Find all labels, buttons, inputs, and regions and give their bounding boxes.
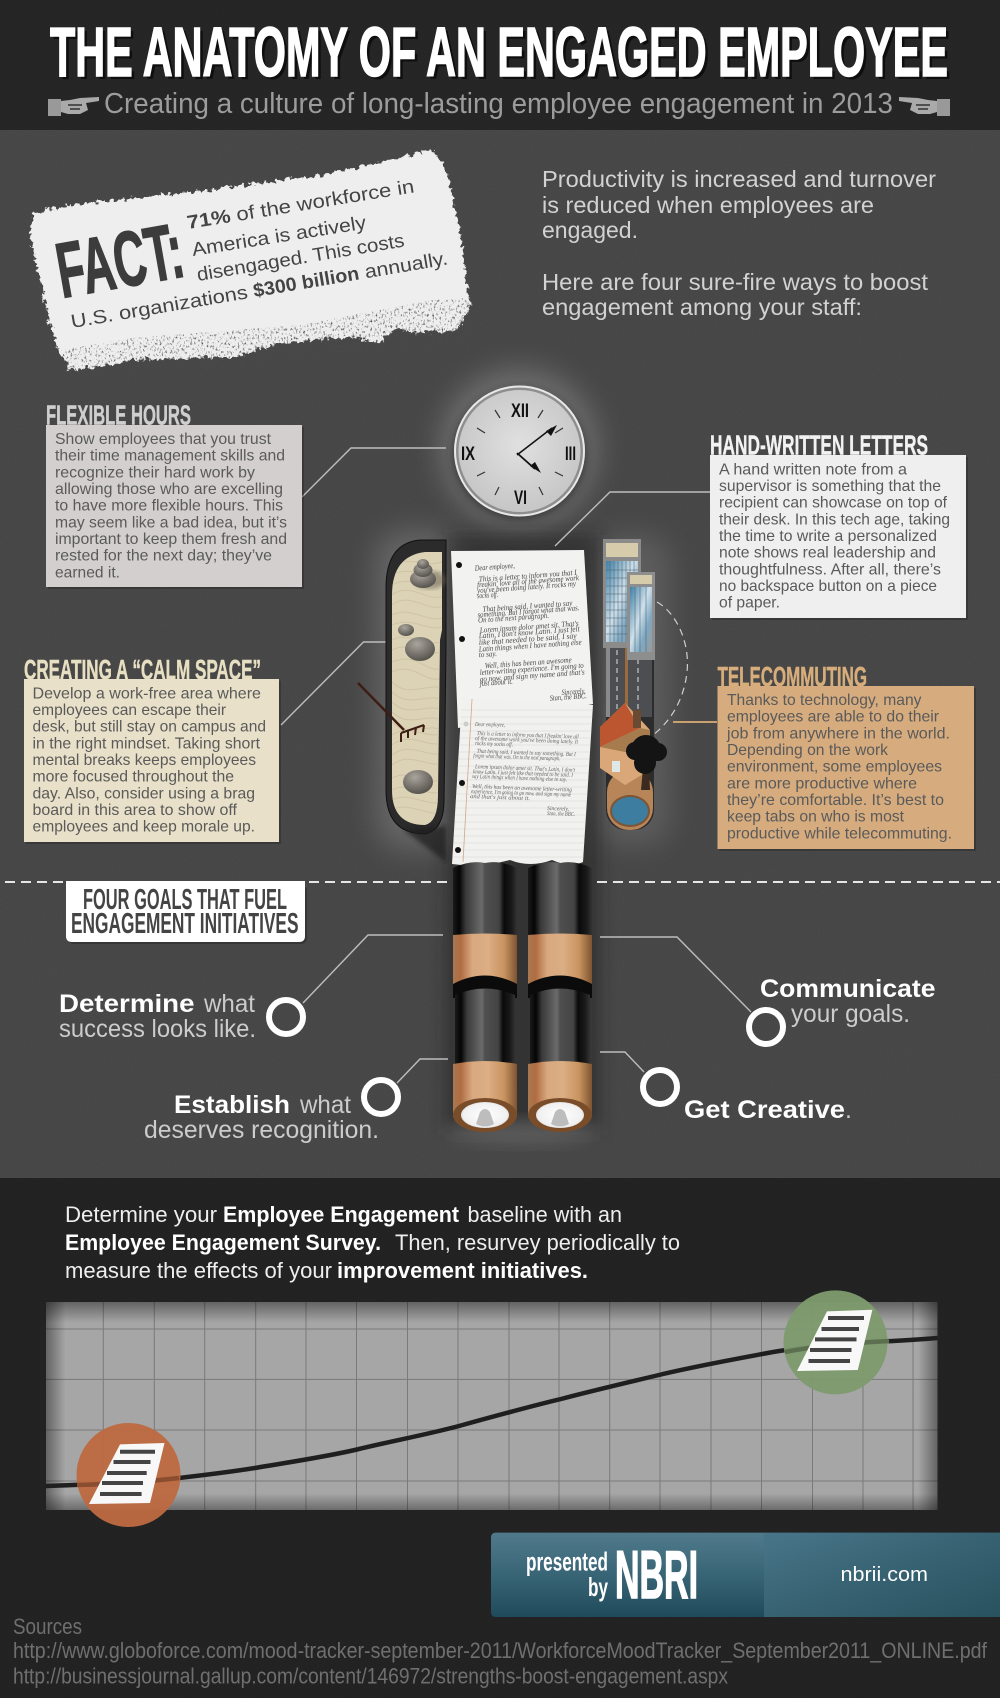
header band	[0, 0, 1000, 130]
goal: get creative: .	[845, 1096, 852, 1124]
bottom band	[0, 1178, 1000, 1698]
body: flexible hours: to have more flexible hours. This	[55, 498, 283, 515]
handwriting second letter: Stan, the BBC.	[547, 811, 575, 818]
fact text: disengaged. This costs	[195, 231, 406, 286]
right battery	[528, 862, 592, 1132]
line chart	[46, 1290, 938, 1527]
handwriting second letter	[470, 722, 579, 818]
chart curve	[46, 1338, 938, 1486]
body: flexible hours: Show employees that you trust	[55, 431, 272, 448]
icon: wall clock head: III	[565, 444, 576, 465]
body: flexible hours: allowing those who are excelling	[55, 481, 283, 498]
goal: communicate	[600, 937, 936, 1044]
fact text: annually.	[363, 249, 449, 283]
main background	[0, 130, 1000, 1178]
icon: wall clock head: VI	[514, 488, 527, 509]
right building	[627, 572, 655, 660]
body: telecommuting: productive while telecommuting.	[727, 825, 952, 842]
icon: pointing hand right	[899, 97, 950, 116]
body: calm space	[32, 685, 266, 836]
heading: four goals: ENGAGEMENT INITIATIVES	[71, 908, 298, 940]
fact text: $300 billion	[252, 264, 361, 302]
banner: presented by NBRI: NBRI	[615, 1537, 698, 1613]
handwriting first letter: Stan, the BBC.	[550, 691, 587, 703]
body: calm space: mental breaks keeps employees	[32, 752, 256, 769]
body: flexible hours: may seem like a bad idea, but it’s	[55, 514, 287, 531]
heading: four goals: FOUR GOALS THAT FUEL	[83, 884, 287, 916]
banner: presented by NBRI: by	[588, 1572, 608, 1602]
body: flexible hours: rested for the next day; they’ve	[55, 548, 272, 565]
pool deck	[607, 770, 653, 830]
connector: calm space	[281, 642, 414, 725]
body: flexible hours: their time management skills and	[55, 448, 285, 465]
handwriting second letter: experience. I'm going to go now, and sign my name	[471, 789, 571, 798]
goal: get creative	[600, 1052, 852, 1124]
handwriting first letter: Sincerely,	[561, 686, 586, 697]
body: calm space: board in this area to show off	[32, 802, 238, 819]
body: hand-written letters: their desk. In this tech age, taking	[719, 511, 950, 528]
marker: baseline survey orange	[76, 1423, 180, 1527]
connector: flexible hours	[302, 448, 446, 497]
body: hand-written letters: the time to write a personalized	[719, 528, 937, 545]
body: hand-written letters: recipient can showcase on top of	[719, 495, 948, 512]
icon: lined letter lower torso	[450, 697, 600, 865]
body: telecommuting	[726, 692, 952, 842]
icon: pointing hand left	[48, 97, 99, 116]
survey text: improvement initiatives.	[337, 1258, 588, 1283]
handwriting first letter: like that needed to be said. I say	[479, 631, 577, 647]
body: telecommuting: environment, some employees	[727, 759, 942, 776]
body: flexible hours: important to keep them fresh and	[55, 531, 287, 548]
handwriting second letter: Dear employee,	[474, 722, 505, 729]
handwriting first letter: Latin things when I have nothing else	[478, 638, 582, 654]
body: calm space: employees and keep morale up.	[32, 819, 255, 836]
intro text: is reduced when employees are	[542, 192, 874, 218]
handwriting first letter: Well, this has been an awesome	[485, 655, 572, 670]
survey text: measure the effects of your	[65, 1258, 332, 1283]
survey text	[65, 1202, 680, 1283]
connector: telecommuting	[673, 721, 717, 723]
heading: telecommuting: TELECOMMUTING	[718, 661, 867, 692]
icon: zen garden arm	[386, 540, 446, 862]
handwriting first letter: Dear employee,	[474, 561, 515, 573]
icon: rake	[358, 683, 424, 742]
banner: presented by NBRI	[491, 1533, 1000, 1617]
body: telecommuting: employees are able to do their	[727, 709, 940, 726]
body: hand-written letters: note shows real leadership and	[719, 545, 936, 562]
body: hand-written letters	[719, 461, 950, 612]
icon: wall clock head	[452, 386, 586, 520]
body: hand-written letters: thoughtfulness. After all, there’s	[719, 561, 941, 578]
body: calm space: more focused throughout the	[32, 769, 234, 786]
handwriting first letter: This is a letter to inform you that I	[479, 568, 577, 584]
banner: presented by NBRI: presented	[526, 1547, 608, 1577]
intro text	[542, 166, 936, 320]
icon: wall clock head: XII	[511, 401, 529, 422]
banner: presented by NBRI: nbrii.com	[840, 1564, 928, 1586]
body: telecommuting: job from anywhere in the world.	[726, 725, 950, 742]
subtitle: Creating a culture of long-lasting employee engagement in 2013	[104, 88, 893, 120]
body: telecommuting: Thanks to technology, many	[727, 692, 922, 709]
body: hand-written letters: supervisor is something that the	[719, 478, 941, 495]
body: telecommuting: are more productive where	[727, 775, 917, 792]
section divider dashed	[5, 881, 1000, 883]
panel: flexible hours	[46, 400, 304, 589]
fact text: America is actively	[190, 213, 368, 261]
handwriting first letter: go now, and sign my name and that's	[480, 667, 585, 684]
fact text: U.S. organizations	[69, 282, 249, 333]
goal: establish: deserves recognition.	[144, 1116, 379, 1144]
body: calm space: desk, but still stay on campus and	[32, 719, 266, 736]
handwriting first letter: That being said, I wanted to say	[482, 598, 573, 614]
goal: determine: what	[203, 990, 255, 1018]
goal: determine: Determine	[59, 990, 195, 1018]
handwriting second letter: Sincerely,	[547, 806, 570, 813]
sources	[13, 1614, 988, 1688]
heading: four goals	[66, 881, 307, 944]
handwriting second letter: and that's just about it.	[470, 794, 530, 802]
sources: http://businessjournal.gallup.com/content/146972/strengths-boost-engagement.aspx	[13, 1664, 728, 1688]
body: telecommuting: keep tabs on who is most	[727, 809, 905, 826]
handwriting first letter	[474, 561, 587, 703]
body: flexible hours: earned it.	[55, 564, 120, 581]
goal: communicate: Communicate	[760, 975, 936, 1003]
body: telecommuting: Depending on the work	[727, 742, 889, 759]
handwriting second letter: That being said, I wanted to say something. But I	[477, 749, 577, 758]
handwriting first letter: socks off.	[477, 590, 498, 600]
panel: telecommuting	[718, 661, 976, 851]
intro text: Productivity is increased and turnover	[542, 166, 936, 192]
icon: city and house arm	[600, 539, 687, 830]
handwriting second letter: Lorem ipsum dolor amet sit. That's Latin, I don't	[474, 764, 575, 774]
body: calm space: employees can escape their	[32, 702, 227, 719]
connector: hand-written letters	[555, 492, 710, 546]
pool	[612, 797, 648, 825]
handwriting second letter: forgot what that was. On to the next paragraph.	[473, 752, 560, 762]
intro text: engaged.	[542, 217, 638, 243]
handwriting first letter: Lorem ipsum dolor amet sit. That's	[479, 619, 579, 635]
icon: wall clock head: IX	[461, 444, 475, 465]
body: flexible hours: recognize their hard work by	[55, 464, 255, 481]
handwriting first letter: On to the next paragraph.	[478, 611, 549, 625]
survey text: Employee Engagement Survey.	[65, 1230, 381, 1255]
icon: batteries legs	[453, 862, 592, 1132]
body: calm space: in the right mindset. Taking short	[32, 735, 261, 752]
figure glow	[375, 368, 670, 1144]
goal: get creative: Get Creative	[684, 1096, 845, 1124]
marker: resurvey green	[784, 1290, 889, 1394]
body: calm space: day. Also, consider using a brag	[32, 785, 255, 802]
heading: flexible hours: FLEXIBLE HOURS	[46, 400, 191, 430]
intro text: Here are four sure-fire ways to boost	[542, 269, 929, 295]
fact text: 71%	[185, 206, 232, 234]
house	[600, 703, 650, 785]
survey text: baseline with an	[468, 1202, 622, 1227]
body: hand-written letters: of paper.	[719, 595, 780, 612]
survey text: Determine your	[65, 1202, 217, 1227]
fact panel	[30, 150, 472, 378]
road	[606, 645, 652, 717]
goal: establish: Establish	[174, 1091, 290, 1119]
left battery	[453, 862, 517, 1132]
handwriting first letter: something. But I forgot what that was.	[477, 603, 580, 619]
heading: calm space: CREATING A “CALM SPACE”	[24, 654, 261, 685]
handwriting first letter: Latin, I don't know Latin. I just felt	[478, 624, 581, 640]
intro text: engagement among your staff:	[542, 294, 862, 320]
left building	[603, 539, 641, 648]
panel: calm space	[24, 654, 281, 844]
icon: hand-written letter torso	[451, 550, 593, 728]
handwriting first letter: just about it.	[479, 677, 513, 688]
body: calm space: Develop a work-free area where	[32, 685, 261, 702]
handwriting second letter: Well, this has been an awesome letter-writing	[472, 784, 572, 793]
handwriting second letter: know Latin. I just felt like that needed to be said. I	[473, 768, 574, 779]
fact heading: FACT:	[50, 206, 190, 315]
handwriting first letter: to say.	[479, 649, 497, 659]
body: telecommuting: they’re comfortable. It’s best to	[727, 792, 944, 809]
goal: determine: success looks like.	[59, 1015, 256, 1043]
handwriting first letter: you've been doing lately. It rocks my	[476, 579, 577, 595]
goal: establish: what	[299, 1091, 351, 1119]
body: flexible hours	[55, 431, 287, 581]
handwriting second letter: say Latin things when I have nothing else to say.	[472, 774, 567, 783]
panel: hand-written letters	[710, 430, 968, 620]
sources: Sources	[13, 1614, 82, 1639]
goal: determine	[59, 935, 443, 1043]
fact text	[69, 176, 449, 333]
survey text: Then, resurvey periodically to	[395, 1230, 680, 1255]
fact text: of the workforce in	[235, 176, 416, 226]
body: hand-written letters: A hand written note from a	[719, 461, 907, 478]
handwriting first letter: letter-writing experience. I'm going to	[480, 661, 584, 677]
handwriting first letter: freakin' love all of the awesome work	[477, 573, 580, 589]
goal: communicate: your goals.	[791, 1000, 910, 1028]
handwriting second letter: of the awesome work you've been doing lately. It	[475, 735, 578, 746]
body: hand-written letters: no backspace button on a piece	[719, 578, 937, 595]
tree	[626, 735, 667, 790]
survey text: Employee Engagement	[223, 1202, 460, 1227]
goal: establish	[144, 1059, 448, 1144]
handwriting second letter: rocks my socks off.	[475, 740, 513, 748]
handwriting second letter: This is a letter to inform you that I freakin' love all	[477, 730, 579, 741]
